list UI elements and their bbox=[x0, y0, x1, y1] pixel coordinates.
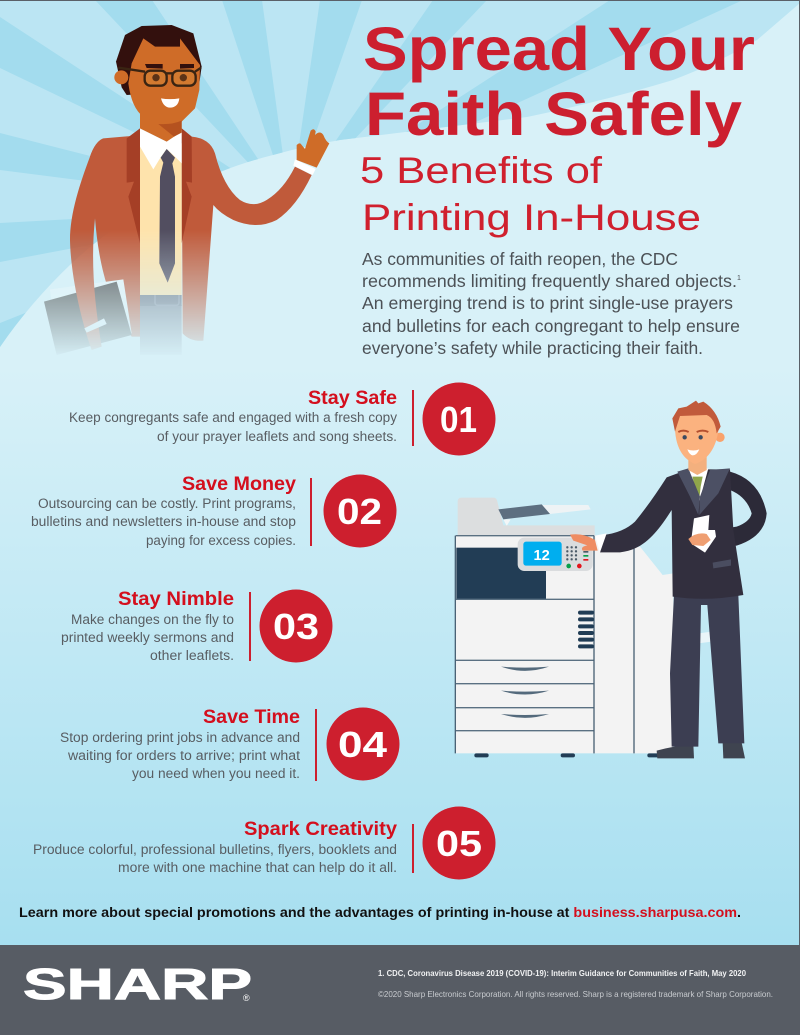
benefit 04: Save Time: waiting for orders to arrive; print what bbox=[67, 748, 300, 763]
shirt bbox=[140, 128, 182, 295]
intro paragraph: 1 bbox=[737, 275, 741, 282]
benefit 01: Stay Safe: of your prayer leaflets and song sheets. bbox=[157, 429, 397, 444]
benefit 03: Stay Nimble bbox=[61, 588, 332, 663]
footnote: 1. CDC, Coronavirus Disease 2019 (COVID-19): Interim Guidance for Communities of Faith, May 2020 bbox=[378, 969, 746, 978]
benefit 01: Stay Safe: 01 bbox=[440, 399, 477, 440]
title: Faith Safely bbox=[365, 80, 742, 148]
subtitle: 5 Benefits of bbox=[360, 149, 603, 191]
Sharp logo: ® bbox=[243, 993, 250, 1003]
businessman bbox=[570, 401, 767, 758]
benefit 03: Stay Nimble: Stay Nimble bbox=[118, 588, 234, 610]
intro paragraph: and bulletins for each congregant to help ensure bbox=[362, 316, 740, 336]
shoes bbox=[657, 743, 745, 758]
intro paragraph: everyone’s safety while practicing their faith. bbox=[362, 338, 703, 358]
benefit 03: Stay Nimble: other leaflets. bbox=[150, 648, 234, 663]
subtitle: Printing In-House bbox=[362, 196, 701, 238]
jacket torso bbox=[90, 128, 312, 341]
Sharp logo: SHARP bbox=[23, 960, 252, 1009]
printer body bbox=[455, 536, 594, 753]
benefit 04: Save Time: 04 bbox=[338, 724, 387, 765]
head bbox=[672, 401, 725, 475]
benefit 01: Stay Safe: Stay Safe bbox=[308, 387, 397, 409]
raised hand bbox=[293, 129, 329, 175]
benefit 02: Save Money bbox=[31, 473, 396, 548]
intro paragraph: An emerging trend is to print single-use prayers bbox=[362, 293, 733, 313]
shirt cuff and hand on panel bbox=[570, 533, 607, 552]
illustration: printer and businessman bbox=[455, 401, 767, 758]
intro paragraph: As communities of faith reopen, the CDC bbox=[362, 249, 678, 269]
held paper and hand bbox=[688, 515, 716, 553]
printer feet bbox=[474, 753, 662, 757]
subtitle bbox=[360, 149, 701, 238]
control panel bbox=[518, 538, 593, 571]
benefit 04: Save Time: Stop ordering print jobs in advance and bbox=[60, 730, 300, 745]
cuff on lower arm bbox=[84, 318, 107, 333]
benefit 03: Stay Nimble: 03 bbox=[273, 606, 319, 647]
benefit 05: Spark Creativity: Produce colorful, professional bulletins, flyers, booklets and bbox=[33, 842, 397, 857]
paper tray handles bbox=[501, 667, 549, 718]
benefit 05: Spark Creativity: 05 bbox=[436, 823, 482, 864]
benefit 02: Save Money: Outsourcing can be costly. Print programs, bbox=[38, 496, 296, 511]
benefit 03: Stay Nimble: Make changes on the fly to bbox=[71, 612, 234, 627]
document feeder bbox=[458, 498, 595, 536]
title: Spread Your bbox=[363, 15, 755, 83]
intro paragraph bbox=[362, 249, 741, 358]
pants and belt bbox=[140, 295, 182, 348]
lapels bbox=[127, 128, 192, 243]
benefit 05: Spark Creativity bbox=[33, 806, 496, 880]
benefit 01: Stay Safe bbox=[69, 382, 496, 456]
benefit 04: Save Time bbox=[60, 706, 400, 781]
jacket pocket bbox=[713, 559, 731, 568]
footer band bbox=[0, 945, 800, 1035]
copyright: ©2020 Sharp Electronics Corporation. All rights reserved. Sharp is a registered trademark of Sharp Corporation. bbox=[378, 990, 773, 999]
benefit 02: Save Money: Save Money bbox=[182, 473, 296, 495]
head bbox=[114, 25, 202, 142]
briefcase bbox=[44, 279, 132, 355]
benefit 05: Spark Creativity: Spark Creativity bbox=[244, 818, 397, 840]
illustration: waving man with glasses bbox=[44, 25, 329, 355]
benefit 02: Save Money: paying for excess copies. bbox=[146, 533, 296, 548]
intro paragraph: recommends limiting frequently shared objects. bbox=[362, 271, 737, 291]
lapels bbox=[677, 468, 730, 515]
trousers bbox=[670, 595, 744, 747]
benefit 04: Save Time: Save Time bbox=[203, 706, 300, 728]
jacket sleeve bbox=[70, 138, 107, 350]
benefit 01: Stay Safe: Keep congregants safe and engaged with a fresh copy bbox=[69, 410, 397, 425]
benefit 05: Spark Creativity: more with one machine that can help do it all. bbox=[118, 860, 397, 875]
benefit 04: Save Time: you need when you need it. bbox=[132, 766, 300, 781]
jacket bbox=[600, 469, 767, 599]
call to action: Learn more about special promotions and the advantages of printing in-house at business.sharpusa.com . bbox=[19, 904, 741, 920]
printer side unit bbox=[594, 536, 712, 753]
background sunburst rays bbox=[0, 0, 800, 360]
vents bbox=[578, 611, 594, 648]
benefit 02: Save Money: 02 bbox=[337, 491, 382, 532]
Sharp logo bbox=[23, 960, 252, 1009]
control panel: 12 bbox=[534, 548, 550, 564]
benefit 03: Stay Nimble: printed weekly sermons and bbox=[61, 630, 234, 645]
title bbox=[363, 15, 755, 148]
tie bbox=[159, 149, 175, 283]
shirt and tie bbox=[687, 468, 708, 502]
benefit 02: Save Money: bulletins and newsletters in-house and stop bbox=[31, 514, 296, 529]
